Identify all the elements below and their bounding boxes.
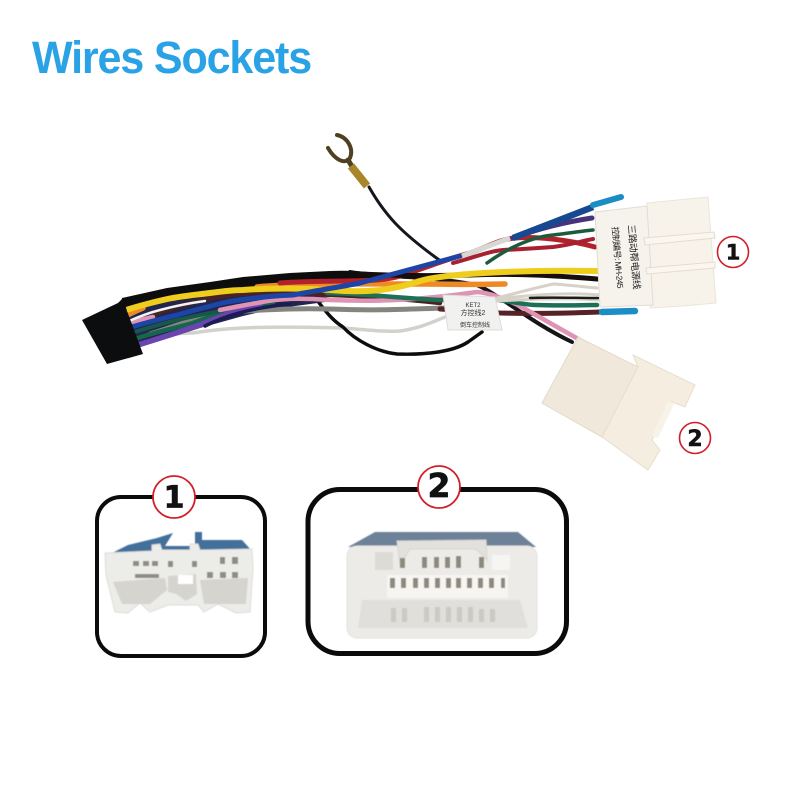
wire label tag: KET2 <box>465 303 481 309</box>
wire: red <box>280 237 595 283</box>
panel 1 frame <box>97 497 265 656</box>
wire: blue <box>128 256 460 328</box>
wire: orange <box>123 284 505 317</box>
wire: white <box>150 317 445 338</box>
connector 1 ribs <box>644 232 715 274</box>
wire: black upper to connector <box>360 274 597 279</box>
title: Wires Sockets <box>32 32 311 83</box>
panel 2 badge <box>418 466 460 508</box>
wire: black ground with fork terminal <box>328 135 442 262</box>
bundle core fill <box>118 288 340 347</box>
badge 1 on harness <box>718 236 748 268</box>
wire: dark navy <box>205 304 290 326</box>
connector 1 printed label: 控制编号: MH-245 <box>610 226 625 289</box>
wire: brown with blue tip <box>440 309 600 313</box>
wire: second red <box>453 239 593 263</box>
badge 1 on harness: 1 <box>726 240 740 264</box>
wire: black to connector <box>530 296 598 299</box>
wire: black crossing <box>350 272 572 342</box>
connector 2 rear <box>542 337 638 437</box>
wire: upper dark green <box>132 309 240 333</box>
wire tip: blue heat shrink top <box>593 197 621 205</box>
connector 2 front <box>602 355 695 470</box>
wire: green to connector <box>327 293 597 305</box>
harness connector 1 <box>595 197 716 308</box>
connector 1 label sleeve <box>595 206 653 307</box>
wire: yellow <box>120 271 597 312</box>
badge 2 on harness: 2 <box>687 427 703 452</box>
wire: purple <box>138 304 260 345</box>
wire: thick blue <box>513 207 593 238</box>
badge 2 on harness <box>680 422 710 454</box>
wire: dark brown <box>153 293 440 315</box>
wire: pink <box>133 292 580 340</box>
connector 1 body <box>647 197 716 308</box>
connector 2 latch <box>652 401 674 438</box>
panel 2 badge: 2 <box>428 466 450 505</box>
wire: white stripe <box>127 301 205 322</box>
socket 1 illustration <box>105 532 253 613</box>
panel 1 badge: 1 <box>164 480 184 516</box>
wire: black loop <box>317 300 482 354</box>
harness connector 2 <box>542 337 695 470</box>
wire: white sleeve on blue <box>462 238 510 256</box>
wire: purple upper <box>513 218 592 238</box>
wire label tag: 方控线2 <box>461 308 486 317</box>
wire label tag: 倒车控制线 <box>460 321 490 329</box>
panel 2 frame <box>308 490 566 654</box>
black plug <box>82 298 143 364</box>
connector 1 printed label <box>610 224 643 290</box>
wire: lower dark green <box>135 304 273 339</box>
black bundle outer sheath <box>120 271 400 314</box>
wire: dark green upper <box>487 230 593 263</box>
wire label tag <box>443 295 502 330</box>
wire: grey <box>150 308 445 334</box>
panel 1 badge <box>153 476 195 518</box>
panel: socket 2 <box>308 466 566 654</box>
connector 1 printed label: 三路动帮电源线 <box>625 224 643 290</box>
socket 2 illustration <box>347 532 537 638</box>
wiring harness <box>118 135 635 354</box>
wires: white to connector <box>497 284 600 301</box>
wire tip: blue heat shrink bottom <box>602 311 635 312</box>
panel: socket 1 <box>97 476 265 656</box>
